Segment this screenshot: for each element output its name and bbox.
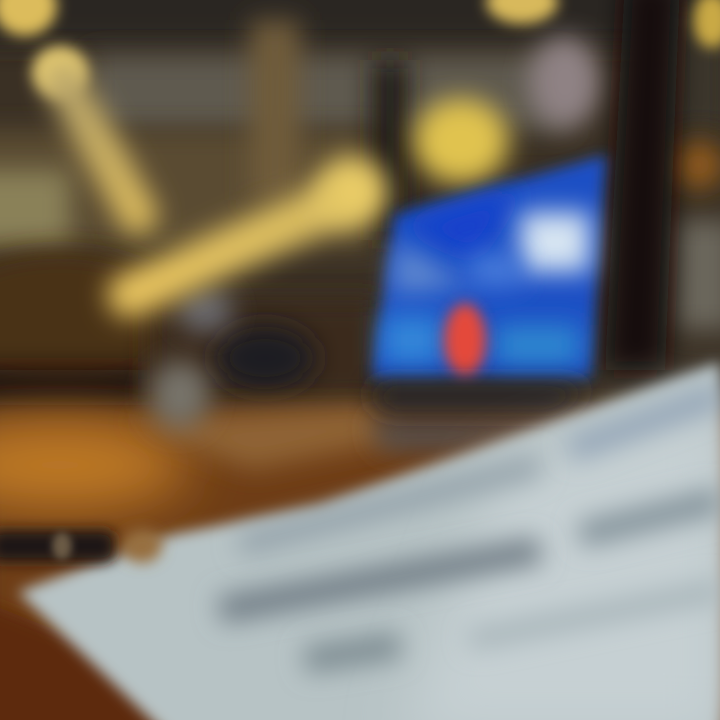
bokeh light: top highlights (486, 0, 720, 189)
bokeh light: round bulb (413, 98, 509, 184)
bokeh light: diagonal glowing bar (130, 156, 388, 295)
paper sheet (18, 362, 720, 720)
laptop base shadow (370, 385, 590, 410)
dark pillar (605, 0, 680, 370)
laptop screen (372, 155, 606, 378)
bokeh light: upper left lamp (0, 0, 138, 215)
red marker on screen (444, 303, 486, 377)
background: dim room (0, 0, 720, 408)
table surface (0, 361, 720, 720)
pen on table (0, 529, 162, 563)
blurred text lines on paper (220, 395, 720, 660)
